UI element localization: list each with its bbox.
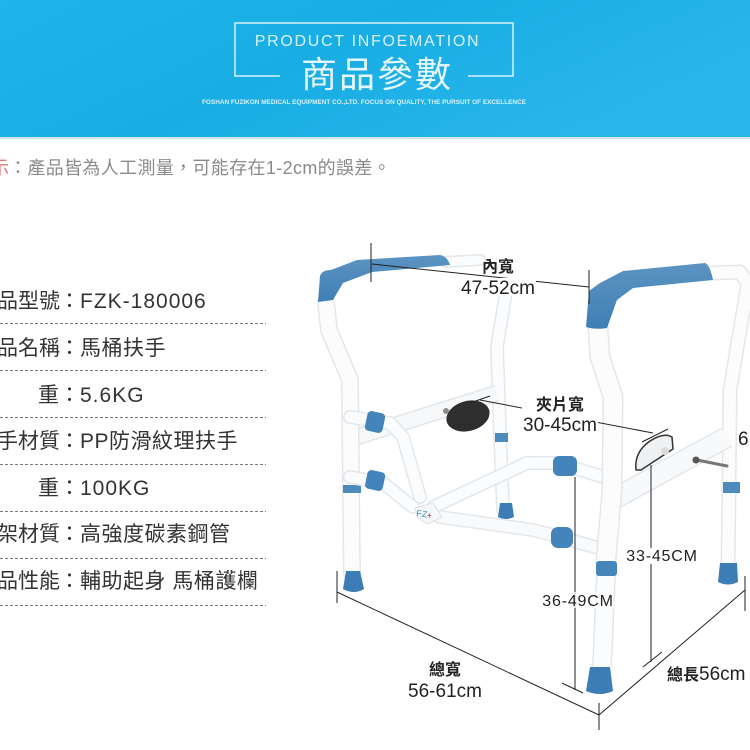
inner clamp arms bbox=[350, 417, 607, 548]
dimension: 33-45CM height bbox=[625, 465, 698, 667]
row: load: 100KG bbox=[80, 477, 150, 500]
header banner: 商品參數 bbox=[301, 54, 453, 95]
row: model: ： bbox=[59, 290, 80, 313]
dimension: inner width: 內寬 bbox=[482, 257, 514, 276]
dimension: overall width: 56-61cm bbox=[408, 681, 482, 702]
dimension: overall length: 總長56cm bbox=[667, 664, 745, 685]
row: name: 馬桶扶手 bbox=[80, 337, 166, 360]
clamp pad: right bbox=[636, 435, 673, 470]
dimension: clamp width: 夾片寬 bbox=[536, 395, 584, 414]
clipped dimension label: 6 bbox=[738, 429, 749, 450]
row: handle material: PP防滑紋理扶手 bbox=[80, 430, 238, 453]
left armrest bbox=[318, 255, 480, 302]
row: frame material: ： bbox=[59, 523, 80, 546]
specification table bbox=[0, 290, 266, 606]
header banner bbox=[0, 0, 750, 139]
header banner: PRODUCT INFOEMATION bbox=[255, 33, 480, 50]
logo plate: FZ bbox=[416, 508, 428, 520]
row: load: ： bbox=[59, 477, 80, 500]
dimension: clamp width bbox=[470, 394, 668, 442]
dimension: overall width bbox=[337, 571, 599, 730]
logo plate: + bbox=[427, 511, 432, 520]
row: load: 重 bbox=[38, 477, 59, 500]
row: name: ： bbox=[59, 337, 80, 360]
adjustment screw bbox=[692, 456, 727, 466]
row: performance bbox=[0, 570, 266, 606]
rear right tube and leg bbox=[713, 272, 748, 584]
row: frame material: 高強度碳素鋼管 bbox=[80, 523, 230, 546]
row: load bbox=[0, 477, 266, 512]
left crossbar bbox=[357, 393, 497, 437]
logo plate bbox=[415, 503, 442, 524]
blue connectors bbox=[364, 410, 577, 548]
right front tube and leg bbox=[586, 328, 617, 694]
left front tube and leg bbox=[326, 303, 364, 592]
row: handle material: ： bbox=[59, 430, 80, 453]
row: weight: 5.6KG bbox=[80, 384, 145, 407]
row: model: FZK-180006 bbox=[80, 290, 207, 313]
row: model bbox=[0, 290, 266, 324]
row: name bbox=[0, 337, 266, 370]
row: weight: ： bbox=[59, 384, 80, 407]
row: handle material bbox=[0, 430, 266, 464]
clamp pad: black bbox=[443, 396, 493, 436]
product illustration: toilet safety frame bbox=[318, 255, 748, 694]
right armrest bbox=[586, 263, 713, 329]
row: frame material bbox=[0, 523, 266, 558]
row: performance: 輔助起身 馬桶護欄 bbox=[80, 570, 258, 593]
header banner: FOSHAN FUZIKON MEDICAL EQUIPMENT CO.,LTD. FOCUS ON QUALITY, THE PURSUIT OF EXCELLENCE bbox=[202, 100, 526, 106]
dimension: 36-49CM height: 36-49CM bbox=[542, 593, 614, 610]
row: weight: 重 bbox=[38, 384, 59, 407]
dimension: overall length bbox=[599, 576, 745, 715]
row: performance: ： bbox=[59, 570, 80, 593]
dimension: 33-45CM height: 33-45CM bbox=[626, 548, 698, 565]
dimension: overall width: 總寬 bbox=[429, 660, 461, 679]
dimension: inner width bbox=[371, 243, 589, 304]
dimension: inner width: 47-52cm bbox=[461, 278, 535, 299]
right crossbar bbox=[612, 437, 727, 500]
dimension: clamp width: 30-45cm bbox=[523, 415, 597, 436]
rear left tube bbox=[495, 298, 514, 519]
measurement note: ：產品皆為人工測量，可能存在1-2cm的誤差。 bbox=[9, 158, 391, 178]
row: weight bbox=[0, 384, 266, 418]
dimension: 36-49CM height bbox=[541, 477, 614, 693]
